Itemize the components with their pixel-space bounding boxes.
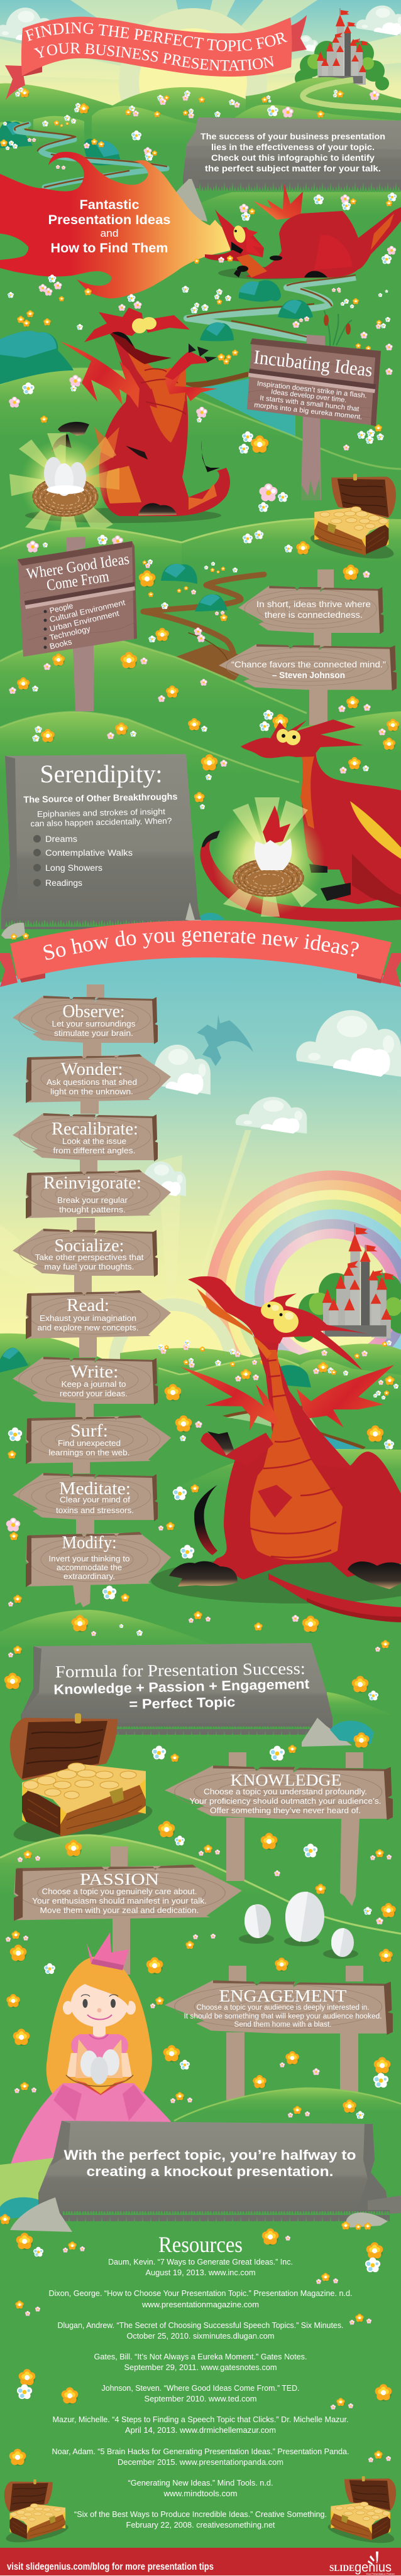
glowing eggs in nest (9, 433, 119, 534)
sign: Knowledge: KNOWLEDGE (230, 1771, 342, 1789)
sign: Where Good Ideas Come From: Technology (49, 624, 92, 642)
sign: Meditate (13, 1473, 158, 1521)
stone tablet: Serendipity: Readings (45, 878, 82, 888)
sign: Engagement (165, 1966, 393, 2103)
resources heading: Resources (158, 2232, 243, 2257)
sign: Reinvigorate: Reinvigorate: (43, 1173, 141, 1193)
sign: Read: Read: (67, 1296, 109, 1315)
resources list: Gates, Bill. “It’s Not Always a Eureka Moment.” Gates Notes. (94, 2352, 307, 2361)
sign: Engagement: Choose a topic your audience is deeply interested in. (196, 2004, 370, 2012)
sign: Incubating Ideas: Incubating Ideas (253, 345, 374, 381)
bush top left (0, 121, 121, 165)
sign: Where Good Ideas Come From: Books (49, 637, 73, 651)
stone tablet: conclusion (10, 2121, 401, 2232)
chest bottom right (326, 2476, 396, 2547)
stone tablet: Serendipity: Epiphanies and strokes of insight (37, 807, 165, 819)
flowers: upper meadow (0, 87, 397, 215)
sign: Wonder: Ask questions that shed (47, 1077, 137, 1087)
sign: quote post and arrow: “Chance favors the connected mind.” (231, 659, 386, 669)
big dragon looking up (151, 1276, 401, 1622)
sign: Engagement: It should be something that will keep your audience hooked. (184, 2013, 382, 2020)
sign: Write (13, 1357, 158, 1405)
sign: quote post and arrow (219, 569, 397, 725)
lower hills (0, 637, 401, 866)
title ribbon: YOUR BUSINESS PRESENTATION (34, 43, 274, 71)
hills lower middle (0, 519, 401, 628)
sign: Modify (26, 1532, 171, 1587)
flowers: rainbow meadow (6, 1340, 398, 1607)
stone tablet: conclusion: creating a knockout presentation. (87, 2164, 333, 2179)
signpost: stacked ideas post (73, 984, 104, 1607)
clouds lower sky (134, 1010, 401, 1196)
top hills (0, 77, 401, 264)
sign: Reinvigorate (26, 1170, 171, 1219)
stone tablet: Serendipity: Dreams (45, 834, 77, 844)
sign: Surf: Surf: (70, 1421, 108, 1441)
flowers: formula meadow (4, 1611, 390, 1700)
resources list: Johnson, Steven. “Where Good Ideas Come From.” TED. (102, 2384, 299, 2393)
stone tablet: Serendipity: Long Showers (45, 863, 102, 873)
sign: Meditate: Clear your mind of (60, 1495, 130, 1504)
river middle (187, 275, 356, 338)
sign: Where Good Ideas Come From: Come From (45, 568, 111, 594)
flowers: hill patch (288, 2099, 364, 2119)
flame with title text: Presentation Ideas (48, 213, 171, 227)
sign: Incubating Ideas: Inspiration doesn’t strike in a flash. (256, 380, 367, 400)
left bush and hill at base (0, 2158, 53, 2223)
stone tablet: intro: The success of your business presentation (200, 132, 385, 141)
sign: Passion: PASSION (80, 1870, 159, 1889)
sign: Engagement: ENGAGEMENT (219, 1986, 347, 2005)
sign: Socialize: Socialize: (54, 1236, 124, 1256)
sign: Surf: Find unexpected (58, 1438, 121, 1448)
resources list: Daum, Kevin. “7 Ways to Generate Great Ideas.” Inc. (108, 2258, 293, 2266)
resources list: September 2010. www.ted.com (145, 2395, 256, 2403)
sky with sun rays (0, 0, 401, 156)
flowers: middle meadow (8, 212, 396, 512)
eggs on the grass (239, 1892, 358, 1959)
stone tablet: Serendipity: Contemplative Walks (45, 848, 133, 858)
sign: Socialize (13, 1229, 158, 1277)
stone tablet: Serendipity: can also happen accidentally. When? (30, 816, 172, 828)
sign: Where Good Ideas Come From: Where Good Ideas (25, 551, 130, 583)
sign: Recalibrate: Look at the issue (62, 1136, 126, 1146)
dragon silhouette in sky (197, 1015, 253, 1066)
resources list (49, 2258, 352, 2530)
SlideGenius logo: SLIDE (329, 2563, 354, 2573)
sign: Reinvigorate: thought patterns. (59, 1205, 126, 1214)
sign: Modify: accommodate the (57, 1563, 122, 1572)
treasure chest (309, 474, 396, 564)
sign: Passion: Move them with your zeal and dedication. (40, 1906, 199, 1915)
resources list: Dixon, George. “How to Choose Your Presentation Topic.” Presentation Magazine. n.d. (49, 2289, 352, 2298)
stone tablet: formula (21, 1643, 374, 1747)
sign: Where Good Ideas Come From (18, 537, 137, 711)
banner: So how do you generate new ideas?: So how do you generate new ideas? (43, 930, 359, 960)
resources list: December 2015. www.presentationpanda.com (118, 2458, 283, 2467)
sign: Write: Keep a journal to (62, 1379, 126, 1389)
resources list: “Generating New Ideas.” Mind Tools. n.d. (128, 2479, 273, 2487)
sign: Observe: Let your surroundings (52, 1019, 136, 1028)
base tufts of flowers (0, 933, 371, 2230)
sign: quote post and arrow: In short, ideas thrive where (256, 599, 371, 609)
flame with title text: How to Find Them (50, 241, 168, 256)
sign: Observe (13, 996, 158, 1044)
sign: Read (26, 1290, 171, 1339)
sign: Modify: Modify: (62, 1533, 117, 1553)
sign: Reinvigorate: Break your regular (57, 1195, 128, 1205)
sign: quote post and arrow: there is connectedness. (265, 610, 363, 620)
SlideGenius logo: genius (354, 2560, 392, 2575)
hatching egg with baby dragon (212, 797, 325, 917)
SlideGenius logo: Your Presentation Partner (366, 2572, 395, 2575)
sign: Modify: Invert your thinking to (49, 1554, 129, 1563)
SlideGenius logo (329, 2552, 395, 2575)
sign: Wonder: Wonder: (60, 1060, 123, 1079)
sign: Meditate: toxins and stressors. (56, 1506, 134, 1515)
resources list: April 14, 2013. www.drmichellemazur.com (125, 2426, 276, 2435)
sign: Where Good Ideas Come From: Urban Environment (49, 609, 120, 633)
mother dragon with hatching egg (200, 719, 401, 922)
sign: Where Good Ideas Come From: Cultural Environment (49, 598, 126, 624)
flowers: path meadow (26, 531, 370, 642)
sign: Passion: Choose a topic you genuinely care about. (41, 1887, 197, 1896)
footer bar (0, 2548, 401, 2576)
resources list: www.mindtools.com (163, 2489, 238, 2498)
sign: Incubating Ideas: morphs into a big eureka moment. (254, 401, 363, 421)
sign: Write: Write: (70, 1362, 118, 1382)
stone tablet: intro (162, 117, 401, 242)
clouds top (0, 6, 401, 52)
sign: Passion (14, 1846, 242, 1975)
hill by passion sign (0, 1835, 401, 1984)
sign: Incubating Ideas: Ideas develop over time. (271, 388, 347, 404)
sign: Knowledge: Choose a topic you understand profoundly. (204, 1787, 367, 1796)
sign: Modify: extraordinary. (63, 1571, 115, 1581)
hills rainbow meadow (0, 1334, 401, 1551)
stone tablet: formula: Knowledge + Passion + Engagement (53, 1676, 310, 1698)
resources list: Dlugan, Andrew. “The Secret of Choosing Successful Speech Topics.” Six Minutes. (58, 2321, 343, 2330)
resources list: Mazur, Michelle. “4 Steps to Finding a Speech Topic that Clicks.” Dr. Michelle Mazur. (53, 2415, 348, 2424)
sign: quote post and arrow: – Steven Johnson (272, 670, 345, 680)
stone tablet: formula: Formula for Presentation Success: (55, 1659, 305, 1681)
chest bottom left (4, 2479, 70, 2546)
sign: Surf: learnings on the web. (49, 1448, 129, 1457)
lower meadow hills (0, 1610, 401, 1752)
sign: Recalibrate: from different angles. (53, 1146, 136, 1155)
flowers: resources (9, 2228, 392, 2466)
sign: Incubating Ideas: It starts with a small hunch that (260, 394, 360, 413)
resources list: September 29, 2011. www.gatesnotes.com (124, 2363, 277, 2372)
resources list: www.presentationmagazine.com (141, 2300, 259, 2309)
resources list: August 19, 2013. www.inc.com (146, 2268, 255, 2277)
resources list: October 25, 2010. sixminutes.dlugan.com (127, 2332, 274, 2341)
sign: Knowledge (165, 1752, 393, 1906)
stone tablet: conclusion: With the perfect topic, you’re halfway to (64, 2147, 356, 2163)
sign: Socialize: may fuel your thoughts. (44, 1262, 135, 1271)
sign: Knowledge: Your proficiency should outmatch your audience’s. (190, 1797, 381, 1806)
resources list: Noar, Adam. “5 Brain Hacks for Generating Presentation Ideas.” Presentation Panda. (52, 2447, 349, 2456)
second castle (292, 1224, 401, 1347)
sign: Engagement: Send them home with a blast. (234, 2021, 332, 2029)
sign: Incubating Ideas (247, 335, 381, 502)
flowers: lower meadow (9, 652, 399, 809)
title ribbon: FINDING THE PERFECT TOPIC FOR (25, 23, 288, 51)
sign: Passion: Your enthusiasm should manifest in your talk. (32, 1897, 207, 1905)
stone tablet: Serendipity (1, 754, 225, 939)
flame with title text (0, 152, 230, 298)
sign: Observe: stimulate your brain. (54, 1028, 133, 1038)
sign: Meditate: Meditate: (59, 1479, 131, 1499)
river top (14, 123, 167, 187)
title ribbon (5, 15, 307, 100)
footer bar: visit slidegenius.com/blog for more presentation tips (7, 2562, 214, 2572)
sign: Surf (26, 1415, 171, 1464)
sign: Socialize: Take other perspectives that (35, 1253, 144, 1262)
stone tablet: Serendipity: The Source of Other Breakthroughs (23, 792, 178, 806)
sign: Wonder: light on the unknown. (50, 1087, 133, 1096)
sign: Where Good Ideas Come From: People (49, 601, 74, 615)
banner: So how do you generate new ideas? (0, 920, 401, 987)
sign: Wonder (26, 1054, 171, 1103)
sign: Read: and explore new concepts. (38, 1323, 138, 1332)
stone tablet: intro: the perfect subject matter for your talk. (205, 164, 381, 173)
stone tablet: formula: = Perfect Topic (129, 1694, 236, 1712)
lower-left hill and pond (0, 331, 401, 540)
sign: Write: record your ideas. (60, 1389, 128, 1398)
sky with rainbow (0, 954, 401, 1426)
flame with title text: Fantastic (79, 198, 140, 212)
stone tablet: intro: lies in the effectiveness of your topic. (211, 143, 375, 152)
sign: Read: Exhaust your imagination (40, 1313, 136, 1323)
flowers: signs meadow (6, 1732, 396, 2103)
resources list: February 22, 2008. creativesomething.net (126, 2521, 275, 2530)
stone tablet: intro: Check out this infographic to identify (211, 153, 375, 163)
hill behind final tablet (174, 2088, 401, 2147)
bushes middle (200, 280, 313, 342)
reeds (324, 311, 352, 347)
winding brown path (143, 574, 264, 681)
dragon breathing fire (205, 184, 401, 279)
stone tablet: Serendipity: Serendipity: (40, 760, 162, 788)
sign: Recalibrate: Recalibrate: (52, 1119, 138, 1139)
sign: Recalibrate (13, 1113, 158, 1161)
bushes by path (161, 564, 228, 612)
resources list: “Six of the Best Ways to Produce Incredible Ideas.” Creative Something. (74, 2510, 327, 2519)
castle on hill (295, 8, 389, 90)
flame with title text: and (101, 227, 118, 239)
sign: Knowledge: Offer something they’ve never heard of. (210, 1806, 361, 1815)
sign: Observe: Observe: (63, 1002, 124, 1021)
large treasure chest (10, 1713, 155, 1850)
princess holding eggs (10, 1932, 189, 2166)
dragon with egg nest (25, 308, 230, 523)
